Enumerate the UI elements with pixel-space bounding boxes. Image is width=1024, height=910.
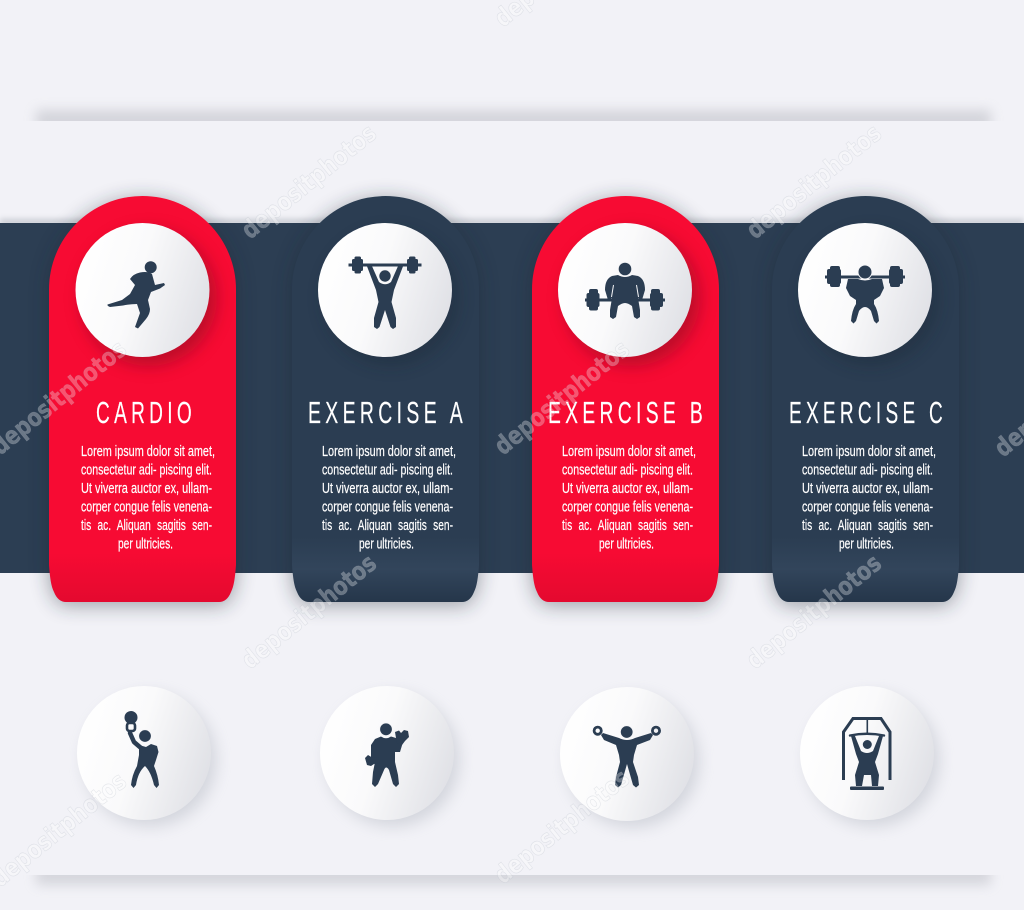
panel: exercise b [532, 196, 719, 605]
badge: lateral raise [560, 687, 699, 827]
watermark text: depositphotos [741, 118, 887, 245]
text block: exercise b: tis ac. Aliquan sagitis sen- [562, 517, 693, 534]
text block: exercise a: Ut viverra auctor ex, ullam- [322, 480, 453, 497]
badge: dumbbell curl [320, 686, 459, 826]
text block: exercise c [802, 443, 936, 552]
text block: exercise c: tis ac. Aliquan sagitis sen- [802, 517, 933, 534]
circle badge: cardio [76, 223, 210, 357]
text block: exercise b: corper congue felis venena- [562, 498, 693, 516]
text block: exercise a: Lorem ipsum dolor sit amet, [322, 443, 456, 460]
text block: cardio [81, 443, 215, 552]
title: exercise b: EXERCISE B [548, 395, 707, 430]
text block: exercise b [562, 443, 696, 552]
title: exercise a: EXERCISE A [308, 395, 467, 430]
text block: exercise a: corper congue felis venena- [322, 498, 453, 516]
icon detail: upper dumbbell [395, 730, 409, 745]
circle badge: exercise a [318, 223, 452, 357]
text block: exercise c: per ultricies. [839, 536, 894, 552]
watermark text: depositphotos [489, 334, 635, 461]
text block: exercise b: Ut viverra auctor ex, ullam- [562, 480, 693, 497]
top shadow strip [36, 110, 991, 130]
text block: cardio: Lorem ipsum dolor sit amet, [81, 443, 215, 460]
icon: lat pulldown [844, 718, 890, 790]
icon: lateral raise [594, 726, 660, 788]
icon: dumbbell curl [365, 723, 409, 787]
watermark text: depositphotos [236, 548, 382, 675]
text block: exercise b: per ultricies. [599, 536, 654, 552]
text block: exercise a: tis ac. Aliquan sagitis sen- [322, 517, 453, 534]
text block: exercise b: consectetur adi- piscing elit. [562, 462, 693, 478]
icon: deadlift [585, 262, 665, 319]
badge: kettlebell [77, 686, 216, 826]
circle badge: exercise b [558, 223, 692, 357]
icon: runner [107, 261, 165, 328]
panel: exercise a [292, 196, 479, 605]
text block: cardio: consectetur adi- piscing elit. [81, 462, 212, 478]
dark horizontal band [0, 219, 1024, 573]
text block: exercise a [322, 443, 456, 552]
text block: exercise c: Lorem ipsum dolor sit amet, [802, 443, 936, 460]
text block: exercise b: Lorem ipsum dolor sit amet, [562, 443, 696, 460]
text block: exercise c: Ut viverra auctor ex, ullam- [802, 480, 933, 497]
bottom shadow strip [36, 864, 991, 885]
text block: exercise c: consectetur adi- piscing elit. [802, 462, 933, 478]
icon: overhead press [348, 256, 422, 329]
text block: cardio: per ultricies. [118, 536, 173, 552]
icon detail: lower dumbbell [365, 755, 380, 766]
text block: cardio: corper congue felis venena- [81, 498, 212, 516]
panel: cardio [49, 196, 236, 605]
text block: exercise a: consectetur adi- piscing elit. [322, 462, 453, 478]
watermark text: depositphotos [236, 118, 382, 245]
panel: exercise c [772, 196, 959, 605]
title: cardio: CARDIO [96, 395, 196, 430]
icon: kettlebell lift [124, 711, 159, 788]
badge: lat pulldown [800, 686, 939, 826]
circle badge: exercise c [798, 223, 932, 357]
icon: back squat [825, 265, 905, 324]
text block: cardio: Ut viverra auctor ex, ullam- [81, 480, 212, 497]
text block: exercise a: per ultricies. [359, 536, 414, 552]
watermark text: depositphotos [489, 763, 635, 890]
text block: exercise c: corper congue felis venena- [802, 498, 933, 516]
text block: cardio: tis ac. Aliquan sagitis sen- [81, 517, 212, 534]
watermark text: depositphotos [741, 548, 887, 675]
